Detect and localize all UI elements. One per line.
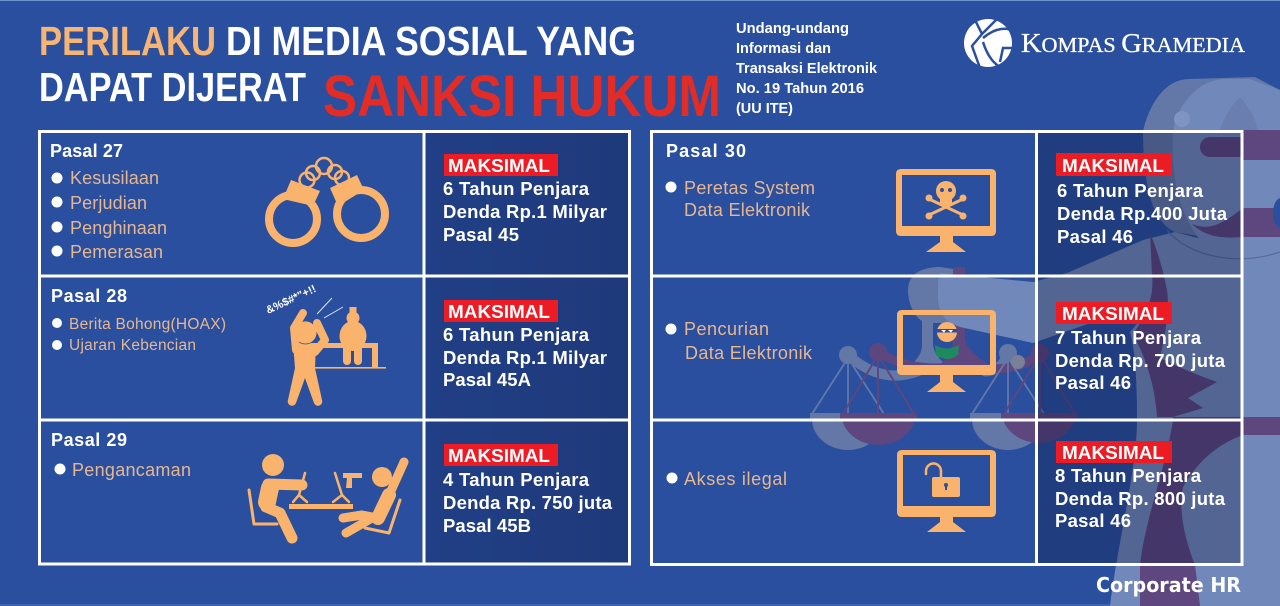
row: pasal 30 illegal access xyxy=(666,441,1226,532)
title: PERILAKU xyxy=(39,18,216,64)
penalty column background xyxy=(1037,132,1242,564)
penalty block: Denda Rp. 700 juta xyxy=(1055,350,1226,371)
heading: Pasal 27 xyxy=(50,141,123,161)
law reference text: No. 19 Tahun 2016 xyxy=(736,80,864,97)
badge xyxy=(1056,302,1172,324)
law reference text: (UU ITE) xyxy=(736,100,793,117)
icon: handcuffs xyxy=(269,158,385,243)
penalty block: Pasal 45B xyxy=(443,515,531,536)
footer: Corporate HR: Corporate HR xyxy=(1096,573,1241,597)
list item: Akses ilegal xyxy=(684,469,787,489)
icon: person shouting at seated person: &%$#*"+!! xyxy=(264,283,318,317)
right panel overlay: pasal 30 penalties xyxy=(651,131,1242,565)
penalty block: MAKSIMAL xyxy=(448,445,550,466)
penalty block: Pasal 45A xyxy=(443,369,531,390)
heading: Pasal 29 xyxy=(51,430,127,450)
list item xyxy=(666,178,815,220)
penalty block: MAKSIMAL xyxy=(1062,303,1164,324)
logo wordmark: KOMPAS GRAMEDIA xyxy=(1021,28,1246,58)
heading: Pasal 30 xyxy=(666,141,746,161)
penalty block: Denda Rp. 800 juta xyxy=(1055,488,1226,509)
law reference text: Transaksi Elektronik xyxy=(736,60,878,77)
list: Berita Bohong(HOAX) xyxy=(69,316,226,333)
panel frame xyxy=(39,131,630,564)
penalty block xyxy=(443,154,607,245)
penalty block: MAKSIMAL xyxy=(448,155,550,176)
row: pasal 28 xyxy=(51,283,607,406)
penalty block: 8 Tahun Penjara xyxy=(1055,465,1202,486)
penalty block xyxy=(1055,441,1226,531)
icon: monitor with skull xyxy=(896,169,996,252)
penalty block xyxy=(443,444,613,536)
penalty block: Pasal 46 xyxy=(1055,510,1131,531)
penalty block: 6 Tahun Penjara xyxy=(443,324,590,345)
penalty block: Denda Rp.1 Milyar xyxy=(443,347,607,368)
law reference text: Informasi dan xyxy=(736,40,831,57)
badge xyxy=(1056,441,1172,463)
list: Pemerasan xyxy=(70,242,163,262)
title: DI MEDIA SOSIAL YANG xyxy=(226,18,636,64)
background illustration: lady justice xyxy=(810,77,1280,606)
badge xyxy=(1056,153,1172,176)
list item: Pencurian xyxy=(684,319,769,339)
penalty block: Denda Rp.400 Juta xyxy=(1057,203,1228,224)
list item xyxy=(666,319,813,363)
penalty block: Denda Rp.1 Milyar xyxy=(443,201,607,222)
penalty block: 6 Tahun Penjara xyxy=(1057,180,1204,201)
badge xyxy=(444,154,558,176)
left panel: pasal 27 to 29 xyxy=(39,131,630,564)
penalty block: MAKSIMAL xyxy=(1062,442,1164,463)
penalty block: Pasal 46 xyxy=(1057,226,1133,247)
penalty block: 4 Tahun Penjara xyxy=(443,469,590,490)
list xyxy=(52,316,226,354)
list: Perjudian xyxy=(70,193,147,213)
list: Penghinaan xyxy=(70,218,167,238)
penalty column background xyxy=(425,132,630,564)
penalty block xyxy=(443,300,607,390)
title: DAPAT DIJERAT xyxy=(39,64,306,110)
panel frame xyxy=(651,131,1242,565)
title xyxy=(39,18,721,129)
icon: monitor with thief xyxy=(897,310,996,392)
logo: Kompas Gramedia xyxy=(964,16,1246,68)
list item: Peretas System xyxy=(684,178,815,198)
penalty block: Pasal 46 xyxy=(1055,372,1131,393)
list: Ujaran Kebencian xyxy=(69,337,196,354)
penalty block: 6 Tahun Penjara xyxy=(443,178,590,199)
row: pasal 30 hacking xyxy=(666,141,1228,252)
icon: monitor with open padlock xyxy=(897,450,996,532)
list xyxy=(52,168,167,262)
list item: Data Elektronik xyxy=(685,343,813,363)
icon: person shouting at seated person xyxy=(264,283,386,406)
penalty block: MAKSIMAL xyxy=(1062,155,1164,176)
law reference text: Undang-undang xyxy=(736,20,849,37)
badge xyxy=(444,300,558,322)
penalty block: 7 Tahun Penjara xyxy=(1055,327,1202,348)
penalty block: MAKSIMAL xyxy=(448,301,550,322)
icon: two people threatening across a table xyxy=(249,454,404,538)
penalty block xyxy=(1055,302,1226,393)
badge xyxy=(444,444,558,466)
title: SANKSI HUKUM xyxy=(323,64,721,129)
row: pasal 29 xyxy=(51,430,613,538)
row: pasal 27 xyxy=(50,141,607,262)
penalty block: Denda Rp. 750 juta xyxy=(443,492,613,513)
row: pasal 30 data theft xyxy=(666,302,1226,393)
list: Kesusilaan xyxy=(70,168,159,188)
penalty block xyxy=(1056,153,1228,247)
law reference text xyxy=(736,20,878,117)
penalty block: Pasal 45 xyxy=(443,224,519,245)
heading: Pasal 28 xyxy=(51,286,127,306)
list: Pengancaman xyxy=(72,460,191,480)
logo mark xyxy=(964,16,1014,68)
list item: Data Elektronik xyxy=(684,200,811,220)
